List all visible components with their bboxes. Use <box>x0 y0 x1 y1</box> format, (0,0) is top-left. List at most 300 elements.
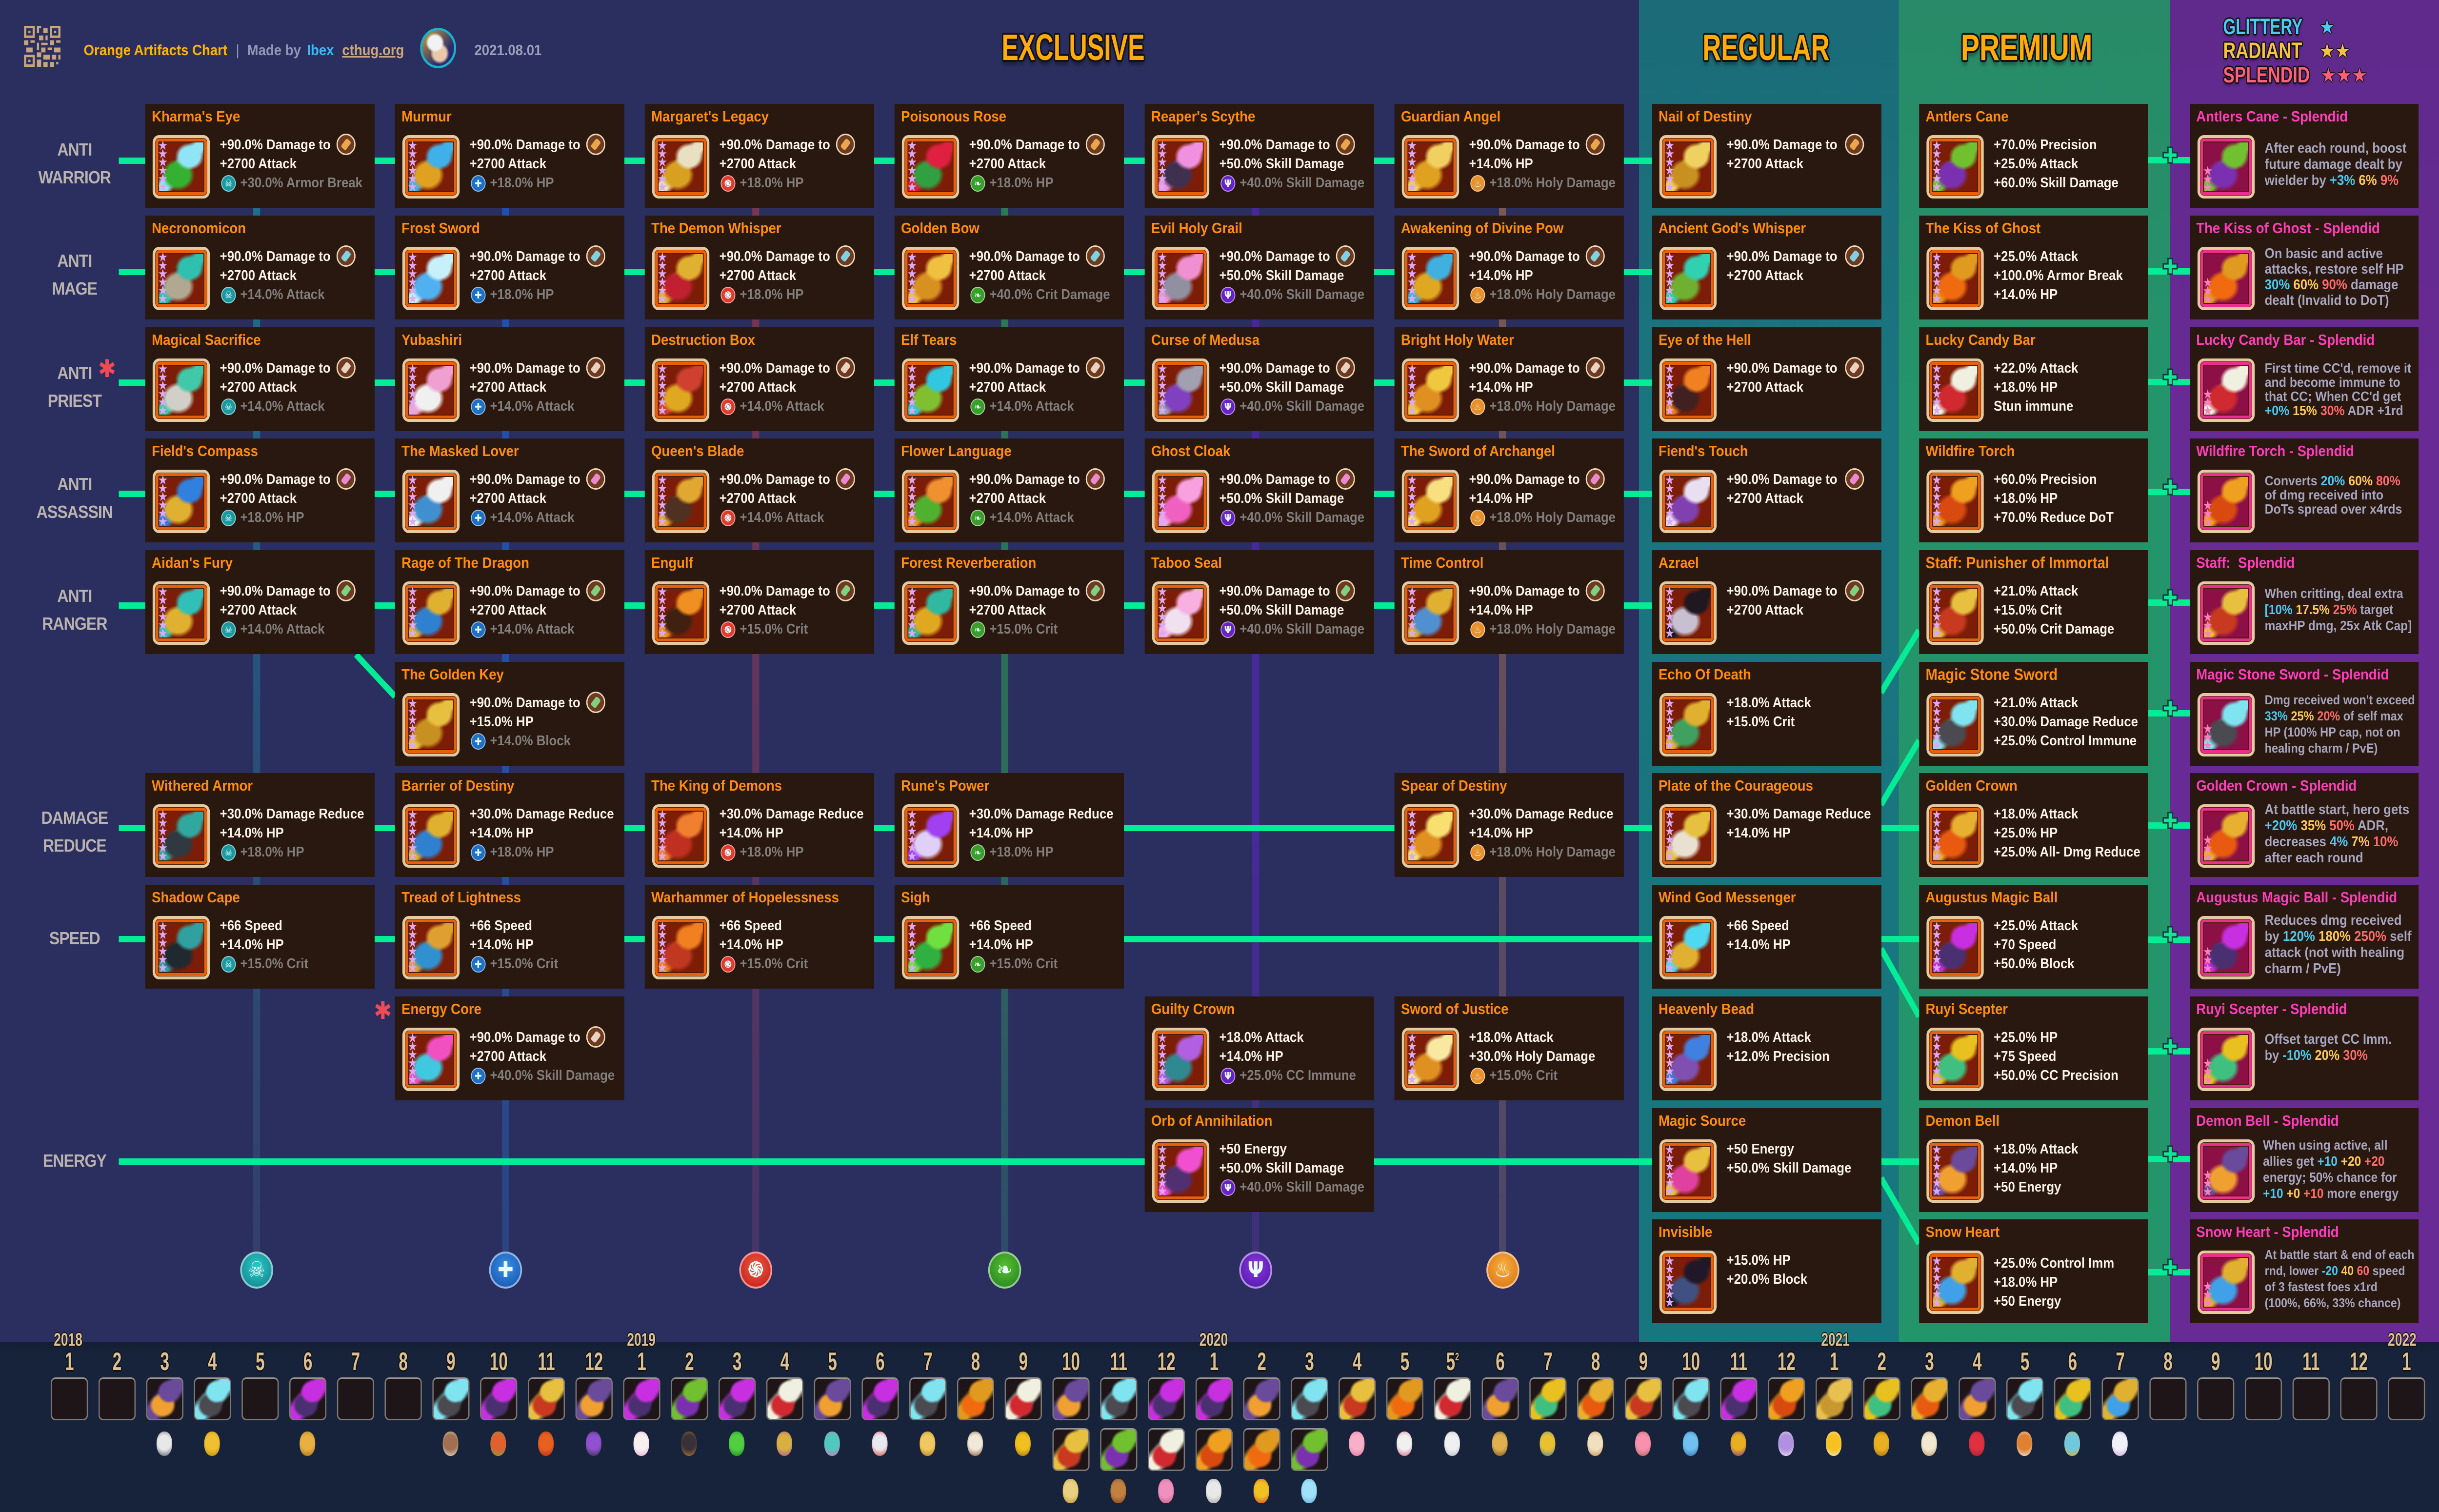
card: Wildfire Torch Splendid: Converts 20% 60% 80% <box>2265 473 2400 488</box>
card: Sigh: Sigh <box>901 889 930 906</box>
card: Kharma's Eye: ☠ <box>224 178 232 189</box>
card: Engulf: +2700 Attack <box>720 602 796 617</box>
card: Guilty Crown: ★★★★★★ <box>1157 1031 1167 1087</box>
card: Spear of Destiny: +18.0% Holy Damage <box>1489 844 1616 859</box>
month 2019-3: 3 <box>733 1348 741 1376</box>
card: Lucky Candy Bar: +22.0% Attack <box>1994 360 2078 376</box>
card: Flower Language: ❧ <box>974 512 981 524</box>
card: Wildfire Torch Splendid: of dmg received into <box>2265 487 2383 502</box>
month 2021-4 <box>1959 1342 1996 1512</box>
card: Magic Source: ★★★★★★ <box>1664 1143 1675 1199</box>
card: Curse of Medusa: Ψ <box>1224 401 1232 413</box>
month 2021-2: 2 <box>1878 1348 1886 1376</box>
card: The Masked Lover <box>395 438 624 542</box>
card: Snow Heart: Snow Heart <box>1926 1223 1999 1240</box>
card: Aidan's Fury: +2700 Attack <box>220 602 297 617</box>
card: Golden Crown: Golden Crown <box>1926 777 2018 794</box>
card: Augustus Magic Ball: +50.0% Block <box>1994 956 2075 972</box>
row label: anti mage: ANTI <box>57 251 92 271</box>
row label: anti assassin <box>37 474 113 522</box>
month 2018-9: 9 <box>446 1348 456 1376</box>
month 2018-3 <box>146 1348 183 1456</box>
card: Lucky Candy Bar: Stun immune <box>1994 398 2073 414</box>
card: Rune's Power: ★★★★★★ <box>907 808 917 864</box>
month 2018-10: 10 <box>490 1348 508 1376</box>
card: Augustus Magic Ball Splendid <box>2190 885 2419 989</box>
card: Kharma's Eye: +90.0% Damage to <box>220 137 331 152</box>
card: Demon Bell <box>1919 1108 2148 1212</box>
row label: anti warrior: ANTI <box>57 139 92 159</box>
timeline background <box>0 1342 2439 1512</box>
card: Magic Stone Sword Splendid <box>2190 662 2419 766</box>
card: Murmur <box>395 104 624 208</box>
card: Guilty Crown: +18.0% Attack <box>1220 1029 1304 1045</box>
card: The King of Demons: +14.0% HP <box>720 825 783 841</box>
card: Magical Sacrifice <box>145 327 375 431</box>
card: Demon Bell Splendid <box>2190 1108 2419 1212</box>
card: Wildfire Torch: +70.0% Reduce DoT <box>1994 509 2114 525</box>
card: Spear of Destiny: +30.0% Damage Reduce <box>1469 806 1613 821</box>
month 2019-1 <box>623 1342 660 1512</box>
month 2021-3: 3 <box>1925 1348 1934 1376</box>
card: Withered Armor: +30.0% Damage Reduce <box>220 806 364 821</box>
card: Bright Holy Water: Bright Holy Water <box>1401 331 1514 348</box>
card: Ruyi Scepter: +75 Speed <box>1994 1049 2056 1064</box>
card: Necronomicon: ☠ <box>224 289 232 301</box>
card: Poisonous Rose: +2700 Attack <box>969 156 1046 172</box>
month 2019-12 <box>1148 1342 1185 1512</box>
month 2018-5: 5 <box>256 1348 265 1376</box>
card: Kharma's Eye <box>145 104 375 208</box>
card: Eye of the Hell: +90.0% Damage to <box>1727 360 1838 376</box>
card: Withered Armor: ★★★★★★ <box>158 808 168 864</box>
card: Queen's Blade: +90.0% Damage to <box>720 471 830 487</box>
card: Curse of Medusa: Curse of Medusa <box>1151 331 1259 348</box>
card: Awakening of Divine Pow: +18.0% Holy Damage <box>1489 287 1616 302</box>
element icon: leaf <box>988 1252 1021 1289</box>
card: Ruyi Scepter Splendid: by -10% 20% 30% <box>2265 1048 2368 1063</box>
card: Magical Sacrifice: +90.0% Damage to <box>220 360 331 376</box>
card: Rage of The Dragon <box>395 550 624 654</box>
card: Awakening of Divine Pow: ♨ <box>1474 289 1481 301</box>
card: The Sword of Archangel: +90.0% Damage to <box>1469 471 1580 487</box>
card: Aidan's Fury: Aidan's Fury <box>152 554 233 571</box>
card: Augustus Magic Ball: Augustus Magic Ball <box>1926 889 2058 906</box>
element icon: cross: ✚ <box>498 1257 514 1282</box>
card: Fiend's Touch: +2700 Attack <box>1727 491 1803 506</box>
card: Time Control: ★★★★★★ <box>1407 585 1417 641</box>
card: Aidan's Fury: ☠ <box>224 624 232 636</box>
month 2019-6 <box>861 1342 899 1512</box>
card: Spear of Destiny <box>1395 773 1624 877</box>
card: Bright Holy Water: +14.0% HP <box>1469 379 1533 395</box>
card: Yubashiri: Yubashiri <box>401 331 462 348</box>
card: Yubashiri: +14.0% Attack <box>490 398 575 414</box>
month 2021-10: 10 <box>2254 1348 2273 1376</box>
card: Rune's Power <box>895 773 1124 877</box>
card: Azrael: ★★★★★★ <box>1664 585 1675 641</box>
element icon: skull: ☠ <box>248 1257 265 1282</box>
card: Energy Core: +2700 Attack <box>470 1049 546 1064</box>
card: Frost Sword: +2700 Attack <box>470 267 546 283</box>
card: Orb of Annihilation: Ψ <box>1224 1182 1232 1194</box>
card: Warhammer of Hopelessness <box>645 885 874 989</box>
card: The Masked Lover: ★★★★★★ <box>408 473 418 529</box>
card: Taboo Seal: ★★★★★★ <box>1157 585 1167 641</box>
card: Ruyi Scepter Splendid: Offset target CC Imm. <box>2265 1032 2392 1047</box>
card: Field's Compass: ☠ <box>224 512 232 524</box>
card: Nail of Destiny: ★★★★★★ <box>1664 139 1675 195</box>
card: Aidan's Fury: ★★★★★★ <box>158 585 168 641</box>
card: Forest Reverberation: ❧ <box>974 624 981 636</box>
card: Shadow Cape: ☠ <box>224 958 232 970</box>
card: The Golden Key: +15.0% HP <box>470 714 534 730</box>
card: Golden Crown Splendid: +20% 35% 50% ADR, <box>2265 818 2388 834</box>
card: The Golden Key: The Golden Key <box>401 666 504 683</box>
legend: glittery, radiant, splendid: ★★ <box>2319 40 2350 62</box>
month 2021-9: 9 <box>2211 1348 2220 1376</box>
month 2019-1: 1 <box>637 1348 646 1376</box>
card: Murmur: ★★★★★★ <box>408 139 418 195</box>
card: Queen's Blade: +14.0% Attack <box>740 509 824 525</box>
card: Heavenly Bead <box>1652 996 1881 1100</box>
card: The Demon Whisper: ★★★★★★ <box>658 250 667 306</box>
card: Snow Heart: ★★★★★★ <box>1932 1254 1942 1310</box>
element icon: flame <box>1486 1252 1519 1289</box>
card: Field's Compass: Field's Compass <box>152 442 258 459</box>
card: Guilty Crown: +25.0% CC Immune <box>1239 1067 1356 1083</box>
card: Margaret's Legacy: +18.0% HP <box>740 175 804 190</box>
card: Ancient God's Whisper: Ancient God's Whisper <box>1659 219 1806 237</box>
card: Field's Compass: ★★★★★★ <box>158 473 168 529</box>
band: premium column background <box>1899 0 2170 1342</box>
card: Magic Stone Sword: +21.0% Attack <box>1994 695 2078 710</box>
card: Withered Armor <box>145 773 375 877</box>
month 2021-12 <box>2340 1342 2378 1512</box>
card: Flower Language: ★★★★★★ <box>907 473 917 529</box>
month 2018-1: 1 <box>65 1348 74 1376</box>
card: Shadow Cape <box>145 885 375 989</box>
card: The Kiss of Ghost: The Kiss of Ghost <box>1926 219 2040 237</box>
card: Wildfire Torch: Wildfire Torch <box>1926 442 2015 459</box>
card: Energy Core: Energy Core <box>401 1000 481 1017</box>
month 2021-1: 1 <box>1830 1348 1839 1376</box>
card: Demon Bell: +14.0% HP <box>1994 1160 2058 1175</box>
card: Ghost Cloak: Ψ <box>1224 512 1232 524</box>
chart title line <box>84 41 541 59</box>
card: Magical Sacrifice: +2700 Attack <box>220 379 297 395</box>
card: Golden Crown Splendid: At battle start, hero gets <box>2265 802 2409 817</box>
card: Necronomicon: ★★★★★★ <box>158 250 168 306</box>
row label: anti ranger: RANGER <box>42 614 107 634</box>
month 2020-5 second <box>1434 1342 1471 1512</box>
card: Shadow Cape: +14.0% HP <box>220 936 284 952</box>
card: Plate of the Courageous: +30.0% Damage Reduce <box>1727 806 1871 821</box>
card: Snow Heart: +18.0% HP <box>1994 1274 2058 1290</box>
card: Engulf: ֍ <box>724 624 732 636</box>
card: Murmur: Murmur <box>401 108 452 125</box>
row label: anti warrior: WARRIOR <box>39 167 111 187</box>
card: Engulf <box>645 550 874 654</box>
card: Ruyi Scepter <box>1919 996 2148 1100</box>
card: Plate of the Courageous: Plate of the Courageous <box>1659 777 1813 794</box>
card: Engulf: +90.0% Damage to <box>720 583 830 599</box>
card: Spear of Destiny: Spear of Destiny <box>1401 777 1507 794</box>
card: Golden Crown Splendid: after each round <box>2265 850 2363 866</box>
card: Augustus Magic Ball: ★★★★★★ <box>1932 919 1942 975</box>
card: Fiend's Touch: Fiend's Touch <box>1659 442 1748 459</box>
card: Spear of Destiny: ♨ <box>1474 847 1481 858</box>
card: Magical Sacrifice: ☠ <box>224 401 232 413</box>
card: Kharma's Eye: +2700 Attack <box>220 156 297 172</box>
card: Time Control: +14.0% HP <box>1469 602 1533 617</box>
card: The King of Demons: +30.0% Damage Reduce <box>720 806 864 821</box>
month 2019-8 <box>957 1342 994 1512</box>
card: Bright Holy Water: +18.0% Holy Damage <box>1489 398 1616 414</box>
note marker: energy core: ✱ <box>374 996 392 1025</box>
QR code <box>24 26 60 67</box>
month 2022-1 <box>2388 1342 2425 1512</box>
month 2019-9: 9 <box>1019 1348 1028 1376</box>
card: Tread of Lightness: +15.0% Crit <box>490 956 558 972</box>
month 2019-2 <box>671 1342 708 1512</box>
card: The Golden Key: +90.0% Damage to <box>470 695 580 710</box>
card: Sigh: ★★★★★★ <box>907 919 917 975</box>
card: Warhammer of Hopelessness: Warhammer of Hopelessness <box>651 889 839 906</box>
card: Snow Heart Splendid: of 3 fastest foes x1rd <box>2265 1279 2378 1294</box>
card: Antlers Cane: +25.0% Attack <box>1994 156 2078 172</box>
card: Rage of The Dragon: +14.0% Attack <box>490 621 575 637</box>
row label: anti priest: PRIEST <box>48 391 101 411</box>
month 2019-11: 11 <box>1110 1348 1127 1376</box>
card: Field's Compass: +18.0% HP <box>240 509 304 525</box>
card: Augustus Magic Ball <box>1919 885 2148 989</box>
card: Guilty Crown <box>1145 996 1374 1100</box>
card: Antlers Cane Splendid: After each round, boost <box>2265 140 2406 156</box>
month 2018-6 <box>289 1348 327 1456</box>
month 2021-6: 6 <box>2068 1348 2077 1376</box>
card: Orb of Annihilation <box>1145 1108 1374 1212</box>
card: Demon Bell Splendid: Demon Bell - Splendid <box>2196 1112 2339 1129</box>
row label: anti assassin: ANTI <box>57 474 92 494</box>
card: The Sword of Archangel: The Sword of Archangel <box>1401 442 1555 459</box>
card: Yubashiri <box>395 327 624 431</box>
card: Snow Heart: +50 Energy <box>1994 1293 2061 1309</box>
card: Magic Stone Sword Splendid: 33% 25% 20% of self max <box>2265 709 2403 723</box>
card: Sword of Justice: +30.0% Holy Damage <box>1469 1049 1595 1064</box>
card: The Golden Key: ✚ <box>475 736 482 747</box>
card: Time Control: +18.0% Holy Damage <box>1489 621 1616 637</box>
card: The Kiss of Ghost Splendid <box>2190 216 2419 319</box>
card: Ruyi Scepter Splendid: Ruyi Scepter - Splendid <box>2196 1000 2347 1017</box>
card: Reaper's Scythe: +90.0% Damage to <box>1220 137 1330 152</box>
card: Antlers Cane: Antlers Cane <box>1926 108 2009 125</box>
card: Tread of Lightness: ★★★★★★ <box>408 919 418 975</box>
month 2019-12: 12 <box>1158 1348 1176 1376</box>
card: Staff: Punisher of Immortal <box>1919 550 2148 654</box>
month 2021-11: 11 <box>2302 1348 2319 1376</box>
card: Guilty Crown: Ψ <box>1224 1070 1232 1082</box>
card: Antlers Cane Splendid: ★★★ <box>2203 164 2213 195</box>
card: Warhammer of Hopelessness: ★★★★★★ <box>658 919 667 975</box>
card: Tread of Lightness: +14.0% HP <box>470 936 534 952</box>
card: Sigh <box>895 885 1124 989</box>
heading: REGULAR: REGULAR <box>1702 27 1830 68</box>
card: Azrael <box>1652 550 1881 654</box>
card: Elf Tears: +90.0% Damage to <box>969 360 1080 376</box>
card: Tread of Lightness <box>395 885 624 989</box>
card: Lucky Candy Bar Splendid: that CC; When CC'd get <box>2265 389 2401 404</box>
card: Engulf: +15.0% Crit <box>740 621 808 637</box>
card: Engulf: Engulf <box>651 554 693 571</box>
chart title line: Ibex <box>307 41 334 59</box>
month 2020-3 <box>1291 1342 1328 1512</box>
card: Staff Splendid: [10% 17.5% 25% target <box>2265 602 2393 617</box>
year label 2021: 2021 <box>1821 1330 1850 1350</box>
month 2019-4: 4 <box>780 1348 789 1376</box>
month 2021-12: 12 <box>2350 1348 2368 1376</box>
month 2021-1 <box>1816 1342 1853 1512</box>
card: Ghost Cloak: ★★★★★★ <box>1157 473 1167 529</box>
card: Margaret's Legacy: +2700 Attack <box>720 156 796 172</box>
card: Kharma's Eye: ★★★★★★ <box>158 139 168 195</box>
card: Field's Compass: +2700 Attack <box>220 491 297 506</box>
heading: PREMIUM: PREMIUM <box>1961 27 2092 68</box>
month 2021-8: 8 <box>2163 1348 2173 1376</box>
card: Augustus Magic Ball: +25.0% Attack <box>1994 918 2078 934</box>
card: Guardian Angel: ♨ <box>1474 178 1481 189</box>
card: The Sword of Archangel: +14.0% HP <box>1469 491 1533 506</box>
month 2018-7 <box>337 1342 374 1512</box>
card: Evil Holy Grail <box>1145 216 1374 319</box>
card: Eye of the Hell: Eye of the Hell <box>1659 331 1751 348</box>
card: Margaret's Legacy: +90.0% Damage to <box>720 137 830 152</box>
month 2020-1 <box>1196 1342 1233 1512</box>
card: Tread of Lightness: Tread of Lightness <box>401 889 521 906</box>
card: Evil Holy Grail: ★★★★★★ <box>1157 250 1167 306</box>
row label: anti priest: ANTI <box>57 363 92 383</box>
card: Rune's Power: +30.0% Damage Reduce <box>969 806 1114 821</box>
card: Wildfire Torch: ★★★★★★ <box>1932 473 1942 529</box>
card: Evil Holy Grail: Evil Holy Grail <box>1151 219 1242 237</box>
card: Antlers Cane Splendid: future damage dealt by <box>2265 157 2402 172</box>
card: Wildfire Torch <box>1919 438 2148 542</box>
card: Bright Holy Water: ★★★★★★ <box>1407 362 1417 418</box>
card: Heavenly Bead: +18.0% Attack <box>1727 1029 1811 1045</box>
month 2020-5 second: 52 <box>1446 1348 1459 1376</box>
card: Flower Language: +2700 Attack <box>969 491 1046 506</box>
card: Sigh: +14.0% HP <box>969 936 1033 952</box>
card: Magic Stone Sword Splendid: healing charm / PvE) <box>2265 741 2378 756</box>
card: Nail of Destiny: +90.0% Damage to <box>1727 137 1838 152</box>
card: Golden Crown <box>1919 773 2148 877</box>
card: Sword of Justice: Sword of Justice <box>1401 1000 1508 1017</box>
card: Antlers Cane <box>1919 104 2148 208</box>
card: Necronomicon <box>145 216 375 319</box>
card: Frost Sword: +90.0% Damage to <box>470 249 580 264</box>
card: Barrier of Destiny: +30.0% Damage Reduce <box>470 806 614 821</box>
card: The Kiss of Ghost: +14.0% HP <box>1994 287 2058 302</box>
card: Plate of the Courageous: +14.0% HP <box>1727 825 1791 841</box>
month 2020-5: 5 <box>1400 1348 1409 1376</box>
card: Frost Sword: ★★★★★★ <box>408 250 418 306</box>
card: Taboo Seal: Taboo Seal <box>1151 554 1222 571</box>
card: Destruction Box: ★★★★★★ <box>658 362 667 418</box>
card: Echo Of Death: +15.0% Crit <box>1727 714 1795 730</box>
month 2018-6: 6 <box>303 1348 312 1376</box>
element icon: swirl <box>740 1252 772 1289</box>
card: Rage of The Dragon: +2700 Attack <box>470 602 546 617</box>
card: Energy Core: +40.0% Skill Damage <box>490 1067 615 1083</box>
month 2019-11 <box>1100 1342 1138 1512</box>
card: Evil Holy Grail: +50.0% Skill Damage <box>1220 267 1344 283</box>
card: Time Control: ♨ <box>1474 624 1481 636</box>
card: Guardian Angel <box>1395 104 1624 208</box>
card: Nail of Destiny: Nail of Destiny <box>1659 108 1752 125</box>
card: Evil Holy Grail: +90.0% Damage to <box>1220 249 1330 264</box>
card: Magic Stone Sword: ★★★★★★ <box>1932 696 1942 753</box>
card: Rune's Power: ❧ <box>974 847 981 858</box>
card: Awakening of Divine Pow: ★★★★★★ <box>1407 250 1417 306</box>
card: Demon Bell Splendid: energy; 50% chance for <box>2263 1170 2397 1185</box>
card: Magic Source <box>1652 1108 1881 1212</box>
card: Lucky Candy Bar: Lucky Candy Bar <box>1926 331 2036 348</box>
card: Golden Crown Splendid <box>2190 773 2419 877</box>
card: The Kiss of Ghost Splendid: dealt (Invalid to DoT) <box>2265 293 2389 308</box>
card: Sword of Justice: ★★★★★★ <box>1407 1031 1417 1087</box>
card: Barrier of Destiny: ✚ <box>475 847 482 858</box>
card: Withered Armor: Withered Armor <box>152 777 253 794</box>
element icon: skull <box>240 1252 273 1289</box>
card: Field's Compass <box>145 438 375 542</box>
row label: anti assassin: ASSASSIN <box>37 502 113 522</box>
month 2021-3 <box>1911 1342 1948 1512</box>
card: Azrael: Azrael <box>1659 554 1699 571</box>
card: Eye of the Hell: +2700 Attack <box>1727 379 1803 395</box>
card: Orb of Annihilation: Orb of Annihilation <box>1151 1112 1272 1129</box>
card: Lucky Candy Bar Splendid: Lucky Candy Bar - Splendid <box>2196 331 2375 348</box>
month 2020-4 <box>1339 1342 1376 1512</box>
card: Ruyi Scepter: ★★★★★★ <box>1932 1031 1942 1087</box>
card: Reaper's Scythe: ★★★★★★ <box>1157 139 1167 195</box>
card: Necronomicon: +2700 Attack <box>220 267 297 283</box>
card: Demon Bell Splendid: When using active, all <box>2263 1137 2387 1153</box>
year label 2018: 2018 <box>54 1330 82 1350</box>
card: Awakening of Divine Pow: +14.0% HP <box>1469 267 1533 283</box>
card: Ruyi Scepter Splendid <box>2190 996 2419 1100</box>
card: Shadow Cape: Shadow Cape <box>152 889 240 906</box>
card: Magic Stone Sword Splendid: Magic Stone Sword - Splendid <box>2196 666 2389 683</box>
card: Rage of The Dragon: Rage of The Dragon <box>401 554 529 571</box>
card: Rage of The Dragon: ✚ <box>475 624 482 636</box>
card: Ghost Cloak <box>1145 438 1374 542</box>
month 2018-8 <box>384 1342 422 1512</box>
month 2021-5: 5 <box>2020 1348 2029 1376</box>
month 2021-9 <box>2197 1342 2234 1512</box>
card: Murmur: ✚ <box>475 178 482 189</box>
card: Forest Reverberation: Forest Reverberation <box>901 554 1036 571</box>
card: Antlers Cane: +70.0% Precision <box>1994 137 2097 152</box>
row label: energy: ENERGY <box>43 1151 106 1171</box>
card: Murmur: +2700 Attack <box>470 156 546 172</box>
card: Antlers Cane: +60.0% Skill Damage <box>1994 175 2119 190</box>
card: Aidan's Fury: +14.0% Attack <box>240 621 325 637</box>
card: The Demon Whisper <box>645 216 874 319</box>
card: Rune's Power: +18.0% HP <box>989 844 1054 859</box>
card: Staff Splendid: ★★★ <box>2203 610 2213 641</box>
month 2018-9 <box>432 1342 470 1512</box>
card: Lucky Candy Bar Splendid: ★★★ <box>2203 387 2213 418</box>
